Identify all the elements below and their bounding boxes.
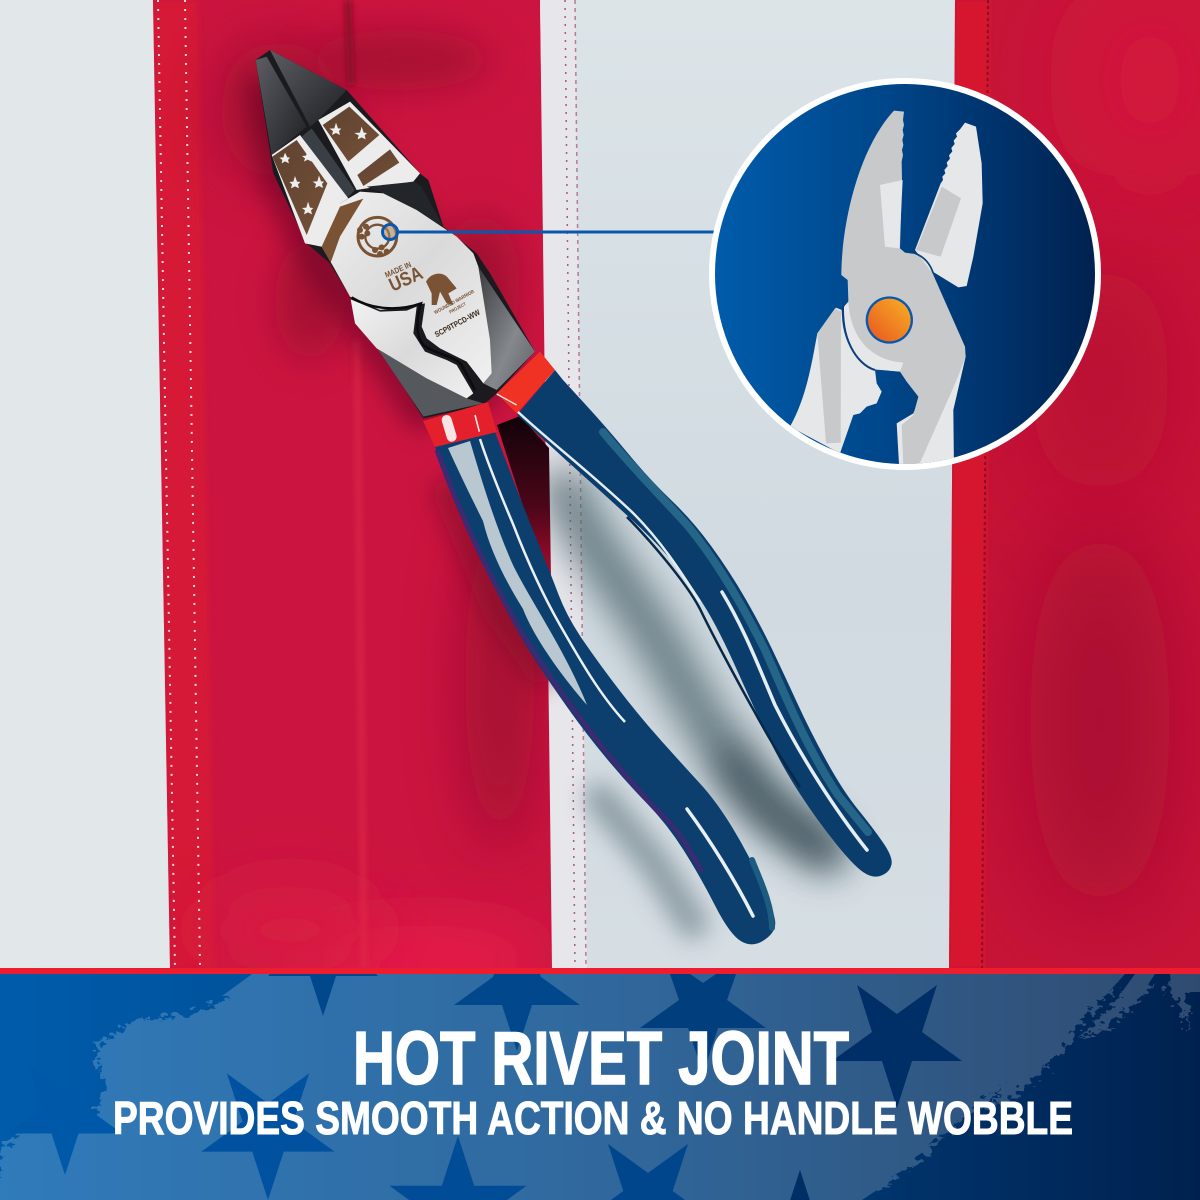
wounded warrior logo (426, 274, 476, 316)
upper jaw insert (880, 180, 903, 248)
red stripe: left (153, 0, 556, 995)
upper right jaw (915, 123, 983, 287)
red stripe: right (949, 0, 1200, 968)
left jaw flag plate (272, 135, 348, 247)
dark shoulder (367, 182, 443, 227)
cutter strip (302, 128, 355, 198)
lower silver jaw (351, 299, 473, 398)
upper right jaw insert (916, 187, 961, 257)
shadow under right handle (565, 490, 825, 850)
banner stars (8, 974, 962, 1200)
head cast shadow (244, 74, 523, 431)
shadow under left handle (600, 798, 693, 924)
dark base of the head (256, 50, 535, 418)
pivot top arc (915, 253, 933, 273)
blue band (0, 974, 1200, 1200)
right handle (517, 370, 892, 877)
callout leader line (382, 224, 714, 240)
brown stripe on body (322, 199, 363, 263)
shadow beside left handle on red (445, 480, 550, 680)
callout circle: hot rivet illustration (712, 81, 1098, 470)
pliers (244, 50, 892, 944)
made in usa mark: USA (386, 263, 426, 296)
white stripe: left (0, 0, 172, 968)
pivot crescent (844, 302, 903, 372)
made in usa mark: MADE IN (383, 260, 413, 280)
rivet logo (357, 217, 397, 257)
lower right handle (light) (897, 357, 966, 470)
flag background photo (153, 0, 1200, 968)
banner (0, 968, 1200, 1200)
red sleeve: left handle (423, 402, 497, 447)
upper jaw and pivot body (841, 111, 966, 467)
distressed flag brush (0, 974, 1200, 1200)
right jaw flag plate (318, 102, 420, 190)
jaw gap line (352, 297, 475, 390)
left handle (435, 432, 775, 944)
wounded warrior logo: WOUNDED WARRIOR (433, 289, 476, 316)
dark jaw tips (256, 50, 347, 155)
lower left handle (light) (790, 308, 882, 453)
stitched seams (158, 0, 175, 968)
heading: HOT RIVET JOINT (353, 1016, 849, 1100)
shadow between handles (497, 416, 551, 578)
red sleeve: right handle (497, 352, 555, 413)
red divider (0, 968, 1200, 974)
plier head (256, 50, 555, 447)
hot rivet (866, 296, 913, 344)
dark core of right handle shadow (730, 760, 825, 850)
pivot arc (843, 303, 875, 370)
model number: SCP9TPCD-WW (433, 308, 482, 339)
main silver body (307, 192, 492, 383)
lower handle insert (817, 308, 841, 443)
wounded warrior logo: PROJECT (448, 301, 467, 315)
lower neck (377, 348, 483, 417)
white stripe: centre (540, 0, 955, 968)
pliers shadow (445, 416, 825, 924)
